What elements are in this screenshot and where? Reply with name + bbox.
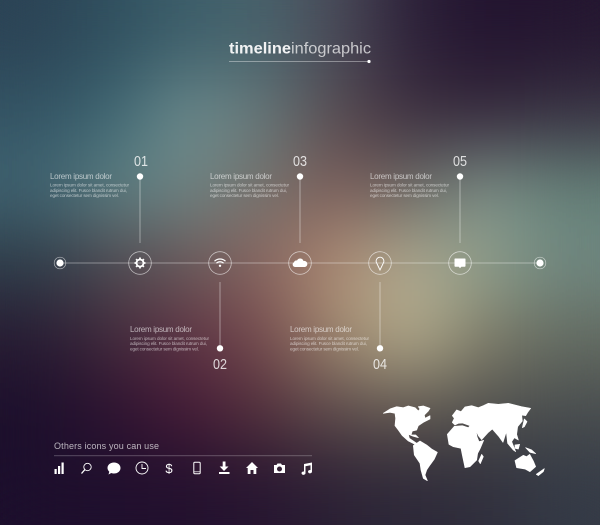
milestone 02: Lorem ipsum dolor sit amet, consectetur xyxy=(130,336,209,341)
milestone 04 xyxy=(290,282,387,373)
milestone 01: eget consectetur sem dignissim vel. xyxy=(50,193,119,198)
milestone 05: eget consectetur sem dignissim vel. xyxy=(370,193,439,198)
icon: cloud xyxy=(289,252,311,274)
South America xyxy=(413,441,437,481)
icon: gear xyxy=(129,252,151,274)
icon: clock xyxy=(136,462,148,474)
icon: bar chart xyxy=(54,462,64,474)
icon: smartphone xyxy=(194,462,200,474)
milestone 05: adipiscing elit. Fusce blandit rutrum dui, xyxy=(370,188,447,193)
icon: magnifier xyxy=(82,463,91,474)
end point xyxy=(534,257,546,269)
icon: speech bubble xyxy=(449,252,471,274)
milestone 03: eget consectetur sem dignissim vel. xyxy=(210,193,279,198)
world map xyxy=(383,403,544,481)
title xyxy=(229,40,371,63)
milestone 02: adipiscing elit. Fusce blandit rutrum dui, xyxy=(130,341,207,346)
icon: music note xyxy=(302,462,312,475)
icon: home xyxy=(246,462,258,474)
milestone 01: Lorem ipsum dolor xyxy=(50,172,112,181)
milestone 01 xyxy=(50,154,148,243)
start point xyxy=(54,257,66,269)
icon: location pin xyxy=(369,252,391,274)
title: timeline xyxy=(229,40,291,58)
Indonesia xyxy=(515,444,536,454)
milestone 02: eget consectetur sem dignissim vel. xyxy=(130,346,199,352)
icon: dollar: $ xyxy=(165,461,173,476)
milestone 05: 05 xyxy=(453,154,467,170)
milestone 04: adipiscing elit. Fusce blandit rutrum dui, xyxy=(290,341,367,346)
timeline axis xyxy=(54,257,546,269)
New Zealand xyxy=(536,469,544,476)
title: infographic xyxy=(291,40,371,58)
milestone 03: Lorem ipsum dolor xyxy=(210,172,272,181)
North America xyxy=(383,406,430,444)
milestone 01: 01 xyxy=(134,154,148,170)
milestone 03: adipiscing elit. Fusce blandit rutrum dui, xyxy=(210,188,287,193)
icons section heading: Others icons you can use xyxy=(54,441,159,451)
icon: chat bubble xyxy=(108,462,120,474)
icon: camera xyxy=(274,464,285,473)
milestone 04: Lorem ipsum dolor sit amet, consectetur xyxy=(290,336,369,341)
milestone 03 xyxy=(210,154,307,243)
milestone 04: eget consectetur sem dignissim vel. xyxy=(290,346,359,352)
milestone 02: Lorem ipsum dolor xyxy=(130,325,192,334)
milestone 02 xyxy=(130,282,227,373)
milestone 01: Lorem ipsum dolor sit amet, consectetur xyxy=(50,182,129,188)
milestone 05: Lorem ipsum dolor xyxy=(370,172,432,181)
Madagascar xyxy=(479,454,483,464)
milestone 03: Lorem ipsum dolor sit amet, consectetur xyxy=(210,182,289,188)
milestone 04: 04 xyxy=(373,357,387,373)
milestone 02: 02 xyxy=(213,357,227,373)
icon row xyxy=(54,461,312,476)
milestone 05 xyxy=(370,154,467,243)
milestone 01: adipiscing elit. Fusce blandit rutrum dui, xyxy=(50,188,127,193)
milestone 05: Lorem ipsum dolor sit amet, consectetur xyxy=(370,182,449,188)
milestone 04: Lorem ipsum dolor xyxy=(290,325,352,334)
Japan xyxy=(522,419,527,428)
milestone 03: 03 xyxy=(293,154,307,170)
Eurasia and Africa xyxy=(447,403,531,468)
Australia xyxy=(515,454,536,472)
icon: wifi xyxy=(209,252,231,274)
icon: download xyxy=(219,462,230,474)
